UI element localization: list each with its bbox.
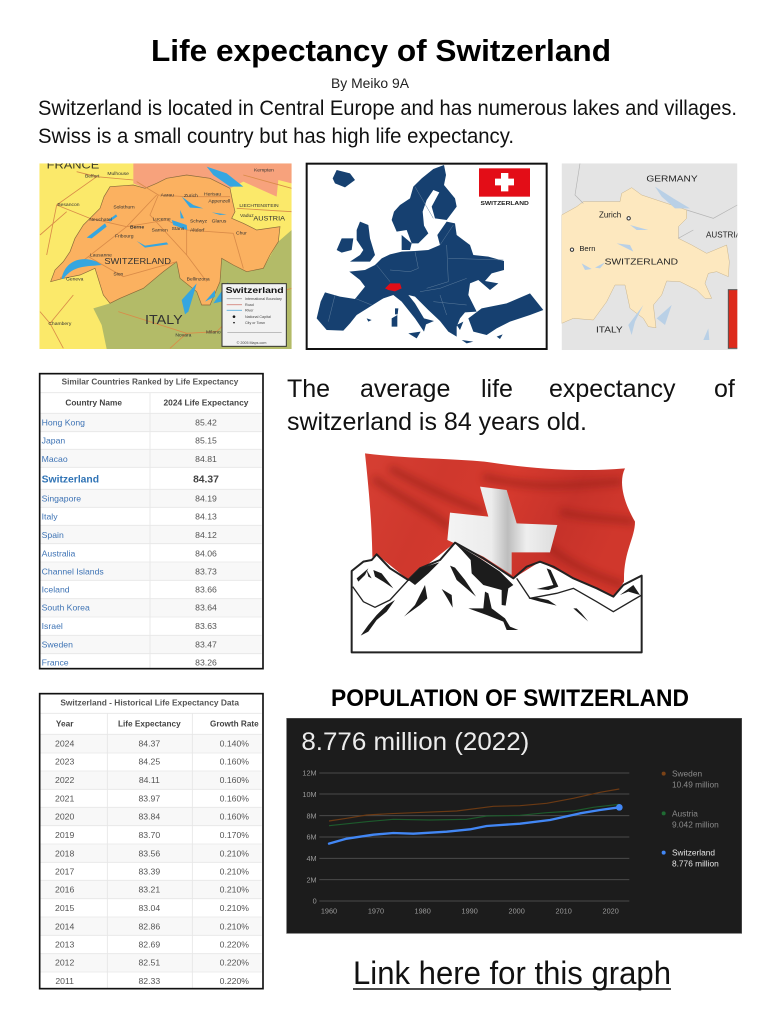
map legend: Switzerland [226, 285, 284, 295]
map: Switzerland political: Bellinzona [187, 277, 210, 283]
table: similar countries ranked: 83.64 [195, 603, 217, 613]
table: historical life expectancy: 84.11 [139, 775, 160, 785]
map: Switzerland simple: Bern [579, 244, 596, 253]
table: historical life expectancy: 0.220% [220, 958, 249, 968]
map: Switzerland political: Glarus [212, 219, 227, 225]
table: similar countries ranked: 84.12 [195, 530, 217, 540]
map: Switzerland political: Berne [130, 224, 144, 230]
Mediterranean islands [408, 332, 421, 338]
map: Switzerland political: Chambery [48, 321, 72, 327]
map legend: Road [245, 303, 254, 307]
table: similar countries ranked: 83.73 [195, 566, 217, 576]
table: similar countries ranked: Iceland [42, 585, 70, 595]
table: historical life expectancy: 0.210% [220, 885, 249, 895]
legend [662, 769, 719, 869]
table: similar countries ranked: Spain [42, 530, 64, 540]
table: similar countries ranked: 85.15 [195, 436, 217, 446]
map: Switzerland political: Stans [172, 226, 185, 232]
intro text [38, 97, 737, 148]
map: Switzerland political: Vaduz [240, 213, 254, 219]
table: historical life expectancy [39, 693, 263, 989]
table: historical life expectancy: 84.25 [138, 757, 160, 767]
table: historical life expectancy: 0.220% [220, 976, 249, 986]
Ireland [337, 238, 353, 253]
table: similar countries ranked: 84.06 [195, 548, 217, 558]
table: similar countries ranked: Singapore [42, 494, 81, 504]
heading: average life expectancy: The [287, 375, 330, 403]
map: Switzerland political: SWITZERLAND [104, 256, 171, 266]
map: Switzerland political: Mulhouse [107, 171, 129, 177]
line: Sweden [329, 789, 619, 821]
map: Switzerland political: Altdorf [190, 228, 205, 234]
table: historical life expectancy: 0.220% [220, 940, 249, 950]
title: Life expectancy of Switzerland [151, 33, 611, 68]
byline: By Meiko 9A [331, 75, 410, 91]
map: Switzerland political: Lausanne [90, 253, 112, 259]
table: similar countries ranked: Macao [42, 454, 68, 464]
table: historical life expectancy: 0.160% [220, 757, 249, 767]
table: similar countries ranked [39, 373, 263, 669]
line: Austria [329, 804, 619, 826]
table: similar countries ranked: 83.26 [195, 658, 217, 668]
axis labels: 6M [306, 833, 317, 842]
intro text: Switzerland is located in Central Europe and has numerous lakes and villages. [38, 97, 737, 120]
table: historical life expectancy: 82.86 [138, 921, 160, 931]
legend: 9.042 million [672, 819, 719, 829]
table: historical life expectancy: 82.33 [138, 976, 160, 986]
table: similar countries ranked: 83.66 [195, 585, 217, 595]
table: historical life expectancy: 82.51 [138, 958, 160, 968]
axis labels: 8M [306, 811, 317, 820]
map: Switzerland political: Novara [175, 333, 192, 339]
table: historical life expectancy: 0.160% [220, 775, 249, 785]
table: similar countries ranked: 2024 Life Expectancy [163, 398, 249, 408]
map: Switzerland political: Solothurn [113, 204, 135, 210]
table: similar countries ranked: Israel [42, 621, 63, 631]
map: Switzerland political: Schwyz [190, 219, 208, 225]
table: similar countries ranked: 85.42 [195, 418, 217, 428]
table: similar countries ranked: Similar Countries Ranked by Life Expectancy [62, 377, 239, 387]
axis labels: 2000 [509, 907, 525, 916]
table: historical life expectancy: 2017 [55, 866, 74, 876]
map: Switzerland political: Milano [206, 329, 221, 335]
Scandinavia [392, 165, 457, 243]
map: Switzerland political: Geneva [66, 276, 84, 282]
Great Britain [350, 222, 375, 262]
table: similar countries ranked: Channel Islands [42, 566, 104, 576]
map: Switzerland simple: AUSTRIA [706, 230, 741, 240]
table: historical life expectancy: 0.140% [220, 739, 249, 749]
map legend [222, 284, 286, 346]
map: Switzerland political: AUSTRIA [253, 216, 286, 223]
chart headline: 8.776 million (2022) [301, 729, 529, 756]
line: Switzerland [329, 807, 619, 844]
table: historical life expectancy: 83.84 [138, 812, 160, 822]
table: historical life expectancy: 2024 [55, 739, 74, 749]
table: historical life expectancy: 83.70 [138, 830, 160, 840]
table: similar countries ranked: 84.13 [195, 512, 217, 522]
table: historical life expectancy: 2011 [55, 976, 74, 986]
table: historical life expectancy: 83.04 [138, 903, 160, 913]
Turkey [468, 293, 543, 335]
table: historical life expectancy: 82.69 [138, 940, 160, 950]
table: historical life expectancy: 2018 [55, 848, 74, 858]
intro text: Swiss is a small country but has high life expectancy. [38, 125, 514, 148]
axis labels: 1990 [462, 907, 478, 916]
axis labels: 0 [313, 897, 317, 906]
chart: population line chart [287, 718, 742, 933]
table: historical life expectancy: 2014 [55, 921, 74, 931]
map: Switzerland simple: Zurich [599, 211, 621, 220]
legend: Sweden [672, 769, 702, 779]
table: similar countries ranked: Sweden [42, 639, 73, 649]
table: historical life expectancy: 84.37 [138, 739, 160, 749]
heading: average life expectancy: expectancy [549, 375, 676, 403]
mountains [352, 543, 642, 652]
table: historical life expectancy: 0.170% [220, 830, 249, 840]
heading: average life expectancy [287, 375, 735, 436]
Denmark [402, 235, 412, 250]
table: historical life expectancy: 0.210% [220, 848, 249, 858]
map: Switzerland political [39, 159, 292, 349]
axis labels [302, 769, 619, 916]
table: similar countries ranked: Australia [42, 548, 76, 558]
table: historical life expectancy: 2016 [55, 885, 74, 895]
table: similar countries ranked: Country Name [65, 398, 122, 408]
table: historical life expectancy: 83.21 [138, 885, 160, 895]
table: historical life expectancy: Switzerland - Historical Life Expectancy Data [60, 698, 239, 708]
Continental Europe [317, 222, 504, 337]
table: historical life expectancy: 2012 [55, 958, 74, 968]
illustration: Swiss flag over mountains [352, 453, 642, 652]
legend: Austria [672, 808, 698, 818]
heading: average life expectancy: of [714, 375, 735, 403]
table: historical life expectancy: 2019 [55, 830, 74, 840]
table: historical life expectancy: 2015 [55, 903, 74, 913]
table: similar countries ranked: 84.37 [193, 474, 219, 485]
axis labels: 2M [306, 875, 317, 884]
table: historical life expectancy: 2022 [55, 775, 74, 785]
axis labels: 10M [302, 790, 317, 799]
table: historical life expectancy: Life Expectancy [118, 718, 181, 728]
map: Switzerland political: Aarau [161, 193, 174, 199]
table: similar countries ranked: 83.47 [195, 639, 217, 649]
table: similar countries ranked: 84.81 [195, 454, 217, 464]
map: Switzerland political: ITALY [145, 313, 183, 327]
map: Switzerland political: Appenzell [208, 199, 230, 205]
map: Switzerland political: Zurich [184, 193, 198, 199]
table: historical life expectancy: 2021 [55, 793, 74, 803]
map legend: © 2005 Maps.com [237, 341, 266, 345]
table: similar countries ranked: Hong Kong [42, 418, 85, 428]
axis labels: 12M [302, 769, 317, 778]
Iceland [333, 170, 355, 187]
heading: population: POPULATION OF SWITZERLAND [331, 685, 689, 712]
axis labels: 4M [306, 854, 317, 863]
map: Switzerland political: Lucerne [153, 217, 171, 223]
table: historical life expectancy: 0.160% [220, 812, 249, 822]
map legend: National Capital [245, 315, 271, 319]
axis labels: 1980 [415, 907, 431, 916]
table: similar countries ranked: Japan [42, 436, 65, 446]
table: historical life expectancy: 0.210% [220, 903, 249, 913]
map: Switzerland simple [562, 163, 742, 350]
table: historical life expectancy: 0.160% [220, 793, 249, 803]
table: historical life expectancy: 2023 [55, 757, 74, 767]
legend: Switzerland [672, 848, 715, 858]
table: similar countries ranked: France [42, 658, 69, 668]
table: historical life expectancy: Growth Rate [210, 718, 259, 728]
flag [365, 453, 635, 598]
map: Switzerland simple: ITALY [596, 325, 623, 335]
table: similar countries ranked: Switzerland [42, 474, 99, 485]
table: similar countries ranked: 84.19 [195, 494, 217, 504]
map: Switzerland political: Belfort [85, 174, 100, 180]
map: Switzerland simple: GERMANY [646, 173, 698, 183]
table: historical life expectancy: 0.210% [220, 866, 249, 876]
map: Switzerland political: FRANCE [47, 159, 99, 171]
table: historical life expectancy: 83.39 [138, 866, 160, 876]
map: Switzerland political: Sion [113, 272, 124, 278]
axis labels: 1970 [368, 907, 384, 916]
map: Switzerland political: Neuchatel [89, 217, 112, 223]
map: Switzerland political: Besancon [57, 202, 80, 208]
table: historical life expectancy: 2020 [55, 812, 74, 822]
table: historical life expectancy: 83.56 [138, 848, 160, 858]
link text: Link here for this graph [353, 955, 671, 991]
table: historical life expectancy: 0.210% [220, 921, 249, 931]
table: similar countries ranked: South Korea [42, 603, 90, 613]
map: Europe locator [307, 164, 547, 349]
table: historical life expectancy: Year [56, 718, 74, 728]
map: Switzerland political: Herisau [204, 192, 221, 198]
map: Switzerland political: Chur [236, 230, 247, 236]
axis labels: 2010 [556, 907, 572, 916]
flag badge: SWITZERLAND [480, 201, 529, 207]
map legend: International Boundary [245, 297, 282, 301]
map: Switzerland political: LIECHTENSTEIN [239, 203, 279, 209]
map: Switzerland political: Kempten [254, 168, 274, 174]
heading: average life expectancy: life [481, 375, 513, 403]
heading: average life expectancy: switzerland is 84 years old. [287, 408, 587, 436]
table: historical life expectancy: 2013 [55, 940, 74, 950]
heading: average life expectancy: average [360, 375, 450, 403]
map: Switzerland political: Sarnen [152, 228, 168, 234]
map: Switzerland political: Fribourg [115, 233, 134, 239]
axis labels: 2020 [603, 907, 619, 916]
flag badge [479, 168, 530, 207]
table: similar countries ranked: Italy [42, 512, 58, 522]
map legend: River [245, 309, 254, 313]
legend: 8.776 million [672, 859, 719, 869]
map legend: City or Town [245, 321, 265, 325]
table: similar countries ranked: 83.63 [195, 621, 217, 631]
map: Switzerland simple: SWITZERLAND [605, 257, 678, 267]
legend: 10.49 million [672, 780, 719, 790]
axis labels: 1960 [321, 907, 337, 916]
table: historical life expectancy: 83.97 [138, 793, 160, 803]
